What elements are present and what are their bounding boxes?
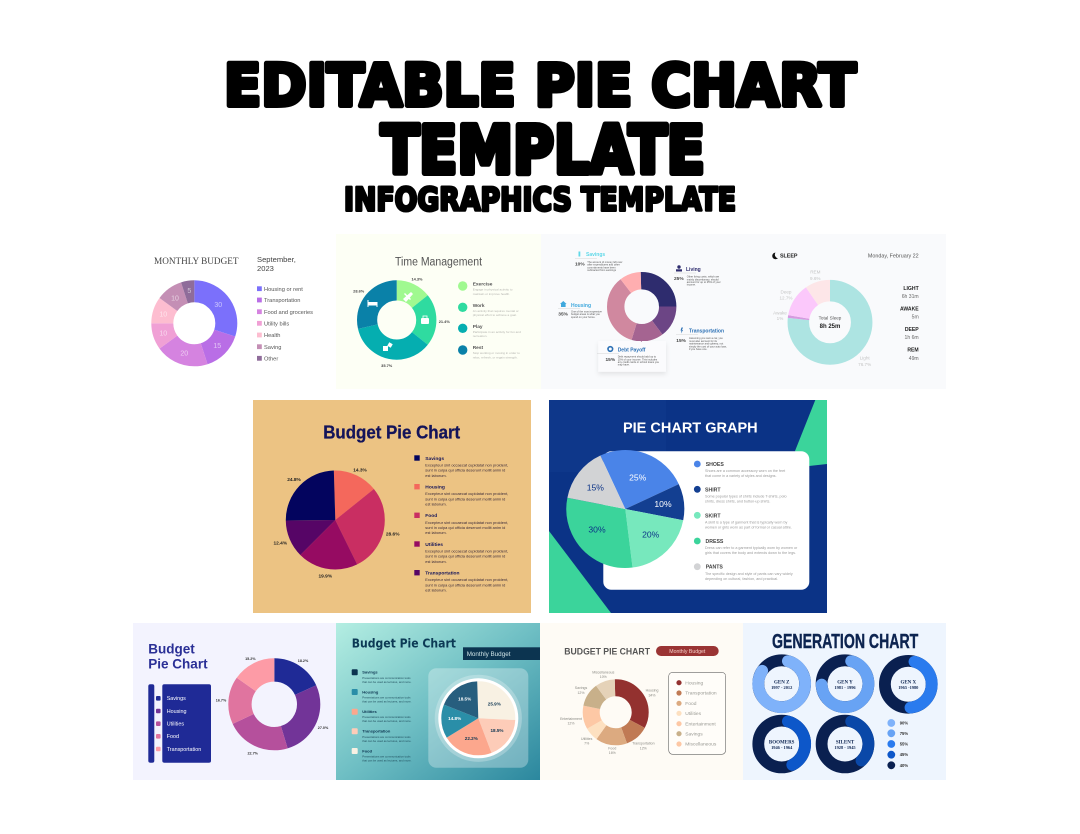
heading: Budget Pie Chart xyxy=(323,422,460,442)
generation labels: 1981 - 1996 xyxy=(834,685,856,690)
legend box: Miscellaneous xyxy=(685,742,717,748)
generation labels: GEN Z xyxy=(774,680,790,686)
pill: monthly budget xyxy=(656,646,719,656)
pie labels: 24.8% xyxy=(287,477,302,483)
donut labels: 27.0% xyxy=(318,726,329,730)
generation labels: 1965 -1980 xyxy=(898,685,919,690)
legend: SHOES xyxy=(706,462,724,468)
callout: housing: One of the most expensive xyxy=(571,310,602,314)
pie chart xyxy=(311,495,360,545)
callout: savings: 10% xyxy=(575,262,585,268)
legend: Presentations are communication tools xyxy=(362,754,411,758)
slice labels: Deep xyxy=(781,289,792,294)
legend: 40% xyxy=(900,763,908,768)
title: TEMPLATE xyxy=(381,112,705,189)
pie labels xyxy=(273,467,400,580)
legend: est laborum. xyxy=(425,502,447,507)
green corner shape bottom left xyxy=(549,531,611,613)
legend xyxy=(257,286,313,362)
generation labels: 1997 - 2012 xyxy=(771,685,792,690)
legend box: Entertainment xyxy=(685,721,716,727)
sleep stats: DEEP xyxy=(905,327,919,333)
callout: debt payoff: 15% xyxy=(606,357,616,363)
callout: savings: after expenditures and other xyxy=(587,263,620,267)
slice labels: 12.7% xyxy=(779,296,793,301)
legend: Engage in physical activity to xyxy=(473,288,513,292)
donut chart: budget xyxy=(162,291,226,355)
title: EDITABLE PIE CHART xyxy=(224,52,856,120)
legend: relax, refresh, or regain strength. xyxy=(473,355,518,359)
legend: Saving xyxy=(264,345,281,351)
callout: debt payoff: Debt Payoff xyxy=(618,348,646,354)
legend: depending on cultural, fashion, and practical. xyxy=(705,577,778,581)
pie labels: 30% xyxy=(588,525,606,535)
legend: est laborum. xyxy=(425,588,447,593)
legend: Excepteur sint occaecat cupidatat non proident, xyxy=(425,577,508,582)
legend: Stop working or moving in order to xyxy=(473,351,520,355)
generation labels xyxy=(769,680,919,750)
heading: Budget Pie Chart xyxy=(352,635,456,650)
legend: PANTS xyxy=(706,565,723,571)
donut labels: 16.7% xyxy=(216,699,227,703)
callout: living: Other living costs, which are xyxy=(687,274,720,278)
slice labels xyxy=(773,270,871,367)
legend: Savings xyxy=(425,456,444,462)
legend: women or girls worn as part of formal or casual attire. xyxy=(705,525,792,529)
date: 2023 xyxy=(257,264,274,273)
sleep stats: 49m xyxy=(909,356,919,362)
banner: monthly budget xyxy=(463,647,540,660)
panel: budget pie chart tan xyxy=(253,400,531,613)
legend: Utility bills xyxy=(264,321,289,327)
pie chart xyxy=(586,470,665,548)
callout: transportation: Transportation xyxy=(689,328,724,334)
legend: that can be used as lectures, and more. xyxy=(362,719,412,723)
donut labels: Housing xyxy=(646,688,658,692)
pie labels: 18.5% xyxy=(458,696,471,701)
legend: 90% xyxy=(900,720,908,726)
legend: 55% xyxy=(900,742,908,746)
percentage labels: 21.4% xyxy=(439,319,450,324)
donut labels: 12% xyxy=(640,747,647,751)
callout: housing: budget areas is what you xyxy=(571,312,600,316)
legend: Exercise xyxy=(473,282,493,288)
date: September, xyxy=(257,255,296,264)
heading: Pie Chart xyxy=(148,657,208,672)
legend: Utilities xyxy=(425,542,443,548)
callout: housing xyxy=(558,301,602,319)
pie labels: 25.9% xyxy=(488,701,501,706)
pie labels xyxy=(587,473,672,539)
donut value labels xyxy=(159,288,222,358)
callout: savings: commitments have been xyxy=(587,265,616,269)
donut chart: sleep xyxy=(798,291,862,354)
callout: transportation: Assuming you own a car, you xyxy=(689,336,723,340)
sleep header: SLEEP xyxy=(780,254,798,260)
donut labels: Utilities xyxy=(581,737,593,741)
donut value labels: 10 xyxy=(159,311,167,318)
pie labels xyxy=(448,696,504,741)
legend: Presentations are communication tools xyxy=(362,676,411,680)
legend: Other xyxy=(264,356,278,362)
callout: transportation: 15% xyxy=(676,338,687,344)
generation labels: 1928 - 1945 xyxy=(834,745,856,750)
slice labels: 76.7% xyxy=(858,362,871,367)
callout: housing: spend on your home. xyxy=(571,315,596,319)
legend: recreation. xyxy=(473,334,487,338)
callout: living xyxy=(674,265,721,287)
legend: sunt in culpa qui officia deserunt mollit anim id xyxy=(425,554,505,559)
legend: Utilities xyxy=(362,709,378,714)
legend: Dress can refer to a garment typically worn by women or xyxy=(705,546,798,550)
legend xyxy=(352,669,412,762)
pie labels: 28.6% xyxy=(386,532,400,538)
legend: sunt in culpa qui officia deserunt mollit anim id xyxy=(425,582,505,587)
donut: gen y xyxy=(816,654,874,713)
legend: Transportation xyxy=(425,570,460,576)
chart card xyxy=(428,668,528,768)
sleep stats: 6h 31m xyxy=(902,294,919,300)
donut chart xyxy=(591,688,640,737)
donut value labels: 10 xyxy=(159,331,167,338)
legend: Food xyxy=(425,513,437,519)
callout: living: account for up to 25% of your xyxy=(687,280,721,284)
callout: living: Living xyxy=(686,267,701,273)
callout: transportation xyxy=(676,328,727,351)
total sleep xyxy=(819,315,842,330)
title: INFOGRAPHICS TEMPLATE xyxy=(344,180,736,218)
donut labels: Food xyxy=(608,747,616,751)
pie labels: 14.8% xyxy=(448,716,461,721)
legend sidebar xyxy=(148,684,211,763)
sleep stats: 5m xyxy=(912,314,919,320)
legend: sunt in culpa qui officia deserunt mollit anim id xyxy=(425,525,505,530)
percentage labels: 14.3% xyxy=(411,276,423,282)
legend: DRESS xyxy=(706,539,724,545)
sleep header: Monday, February 22 xyxy=(868,254,919,260)
callout: savings xyxy=(575,252,623,272)
legend: that can be used as lectures, and more. xyxy=(362,700,412,704)
legend: that can be used as lectures, and more. xyxy=(362,739,412,743)
pie chart xyxy=(460,700,497,737)
legend: Play xyxy=(473,324,483,330)
donut chart: time xyxy=(367,290,426,350)
donut: silent xyxy=(816,715,874,773)
pie labels: 18.5% xyxy=(490,728,504,733)
callout: debt payoff: Debt repayment should add up to xyxy=(618,355,657,359)
legend: est laborum. xyxy=(425,530,447,535)
legend: SKIRT xyxy=(705,513,721,519)
donut labels: 22.7% xyxy=(247,751,259,755)
donut value labels: 20 xyxy=(180,351,188,358)
legend: Transportation xyxy=(264,298,300,304)
legend: 45% xyxy=(900,752,908,757)
donut: gen x xyxy=(879,655,938,714)
pie labels: 19.9% xyxy=(318,574,333,580)
generation labels: 1946 - 1964 xyxy=(771,745,793,750)
white card xyxy=(603,451,809,590)
legend xyxy=(414,455,508,593)
legend box: Transportation xyxy=(685,691,717,697)
heading: BUDGET PIE CHART xyxy=(564,646,650,656)
legend: 75% xyxy=(900,731,908,736)
slice labels: REM xyxy=(810,270,821,274)
sleep stats: REM xyxy=(907,348,919,354)
legend xyxy=(694,461,798,581)
legend: Food xyxy=(362,748,373,753)
donut labels: 34% xyxy=(648,693,656,697)
legend sidebar: Savings xyxy=(167,696,186,702)
legend box: Food xyxy=(685,701,697,707)
callout: savings: subtracted from earnings xyxy=(587,268,617,272)
legend sidebar: Transportation xyxy=(167,747,201,753)
donut chart: expenses xyxy=(616,281,668,333)
donut labels: 18.2% xyxy=(298,659,309,663)
legend: Transportation xyxy=(362,729,391,734)
donut labels: Transportation xyxy=(632,742,655,746)
donut labels: 15.2% xyxy=(245,657,256,661)
legend box: Housing xyxy=(685,680,704,686)
legend: girls that covers the body and extends down to the legs. xyxy=(705,551,796,555)
pie labels: 12.4% xyxy=(273,541,288,547)
percentage labels xyxy=(353,276,450,368)
legend sidebar: Housing xyxy=(167,709,186,715)
callout: savings: The amount of money left over xyxy=(587,260,623,264)
panel: monthly budget xyxy=(133,234,336,389)
sleep stats: LIGHT xyxy=(903,286,920,292)
sleep stats: 1h 6m xyxy=(905,335,919,341)
donut labels: Miscellaneous xyxy=(592,670,615,674)
legend: Housing or rent xyxy=(264,287,303,293)
pie labels: 20% xyxy=(642,529,660,539)
slice labels: 1% xyxy=(777,316,783,321)
pie labels: 25% xyxy=(629,473,647,483)
callout: savings: Savings xyxy=(586,252,605,258)
legend: est laborum. xyxy=(425,473,447,478)
pie labels: 10% xyxy=(654,499,672,509)
callout: debt payoff: any credit cards or school loans you xyxy=(618,360,660,364)
donut: boomers xyxy=(752,715,811,773)
heading: time management: Time Management xyxy=(395,256,483,268)
legend: Some popular types of shirts include T-shirts, polo xyxy=(705,494,787,498)
heading: monthly budget: MONTHLY BUDGET xyxy=(154,257,239,267)
callout: transportation: simply the cost of your auto loan, xyxy=(689,344,727,348)
legend sidebar: Utilities xyxy=(167,722,184,728)
panel: budget pie chart cream xyxy=(540,623,743,780)
legend: sunt in culpa qui officia deserunt mollit anim id xyxy=(425,468,505,473)
legend xyxy=(887,719,908,769)
panel: budget pie chart teal xyxy=(336,623,540,780)
legend: Presentations are communication tools xyxy=(362,735,411,739)
legend: maintain or improve health. xyxy=(473,292,510,296)
callout: living: 25% xyxy=(674,276,684,282)
legend: Shoes are a common accessory worn on the feet xyxy=(705,469,785,473)
callout: debt payoff xyxy=(597,338,666,372)
donut chart xyxy=(240,670,309,739)
legend sidebar: Food xyxy=(167,734,179,740)
slice labels: Awake xyxy=(773,310,787,315)
pie labels: 15% xyxy=(587,482,604,492)
banner: monthly budget: Monthly Budget xyxy=(467,651,511,658)
slice labels: 9.6% xyxy=(810,276,821,281)
title xyxy=(224,52,856,218)
callout: transportation: if you have one. xyxy=(689,347,708,351)
callout: housing: Housing xyxy=(571,303,591,309)
legend: SHIRT xyxy=(705,487,721,493)
heading: PIE CHART GRAPH xyxy=(623,420,758,436)
callout: debt payoff: may have. xyxy=(618,363,630,367)
callout: transportation: maintenance and upkeep, not xyxy=(689,342,723,346)
sleep stats: AWAKE xyxy=(900,306,919,312)
pill: monthly budget: Monthly Budget xyxy=(669,649,706,655)
total sleep: 8h 25m xyxy=(820,324,840,330)
donut labels xyxy=(216,657,329,755)
legend: Savings xyxy=(362,670,378,675)
donut labels: Entertainment xyxy=(560,717,582,721)
generation labels: GEN Y xyxy=(837,680,853,686)
legend: Rest xyxy=(473,345,483,351)
legend: Housing xyxy=(425,484,445,490)
heading: Budget xyxy=(148,641,195,656)
pie labels: 22.2% xyxy=(465,736,478,741)
panel: generation chart xyxy=(743,623,946,780)
legend box: Utilities xyxy=(685,711,702,717)
pie rings xyxy=(435,675,522,762)
donut labels: 10% xyxy=(600,675,607,679)
legend: Participate in an activity for fun and xyxy=(473,330,521,334)
donut labels: 12% xyxy=(567,722,575,726)
legend: Work xyxy=(473,303,485,309)
callout: transportation: must also account for its xyxy=(689,339,718,343)
icons on donut xyxy=(368,292,429,351)
donut value labels: 5 xyxy=(187,288,191,295)
legend: sunt in culpa qui officia deserunt mollit anim id xyxy=(425,496,505,501)
legend: that can be used as lectures, and more. xyxy=(362,758,412,762)
donut labels xyxy=(560,670,658,755)
legend: that come in a variety of styles and designs. xyxy=(705,474,777,478)
panel: time management xyxy=(336,234,541,389)
callout: debt payoff: 15% of your income. This includes xyxy=(618,357,658,361)
legend: physical effort to achieve a goal. xyxy=(473,313,517,317)
pie labels: 14.3% xyxy=(353,467,368,473)
legend: est laborum. xyxy=(425,559,447,564)
legend: Food and groceries xyxy=(264,310,313,316)
donut labels: 12% xyxy=(577,691,585,695)
donut value labels: 30 xyxy=(214,302,222,309)
generation labels: BOOMERS xyxy=(769,740,795,746)
panel: budget pie chart lavender xyxy=(133,623,336,780)
legend: Health xyxy=(264,333,280,339)
total sleep: Total Sleep xyxy=(819,315,842,320)
generation labels: GEN X xyxy=(900,680,917,686)
generation labels: SILENT xyxy=(836,740,855,746)
donut value labels: 15 xyxy=(213,343,221,350)
slice labels: Light xyxy=(860,356,870,361)
heading: GENERATION CHART xyxy=(772,631,918,653)
legend: Housing xyxy=(362,689,379,694)
legend: that can be used as lectures, and more. xyxy=(362,680,412,684)
legend: Presentations are communication tools xyxy=(362,696,411,700)
donut labels: Savings xyxy=(575,686,587,690)
legend: Excepteur sint occaecat cupidatat non proident, xyxy=(425,491,508,496)
legend: shirts, dress shirts, and button-up shirts. xyxy=(705,500,770,504)
legend: Excepteur sint occaecat cupidatat non proident, xyxy=(425,462,508,468)
legend: Presentations are communication tools xyxy=(362,715,411,719)
panel: pie chart graph navy xyxy=(549,400,827,613)
legend xyxy=(458,281,521,359)
sleep stats xyxy=(900,286,920,362)
callout: living: income. xyxy=(687,283,696,287)
donut value labels: 10 xyxy=(171,295,179,302)
donut: gen z xyxy=(752,654,811,713)
donut labels: 16% xyxy=(609,751,616,755)
legend box xyxy=(669,672,726,754)
green corner shape top right xyxy=(795,400,827,466)
legend box: Savings xyxy=(685,731,703,737)
callout: housing: 35% xyxy=(558,312,569,318)
percentage labels: 35.7% xyxy=(381,363,393,368)
legend: Excepteur sint occaecat cupidatat non proident, xyxy=(425,520,508,525)
callout: living: mainly discretionary, should xyxy=(687,277,719,281)
legend: The specific design and style of pants can vary widely xyxy=(705,572,793,576)
panel: expense donut xyxy=(541,234,746,389)
legend: An activity that requires mental or xyxy=(473,309,519,313)
sleep header xyxy=(772,253,919,260)
legend: Excepteur sint occaecat cupidatat non proident, xyxy=(425,548,508,554)
legend: A skirt is a type of garment that is typically worn by xyxy=(705,520,788,524)
donut labels: 7% xyxy=(584,742,589,746)
percentage labels: 28.6% xyxy=(353,288,365,294)
panel: sleep xyxy=(746,234,946,389)
